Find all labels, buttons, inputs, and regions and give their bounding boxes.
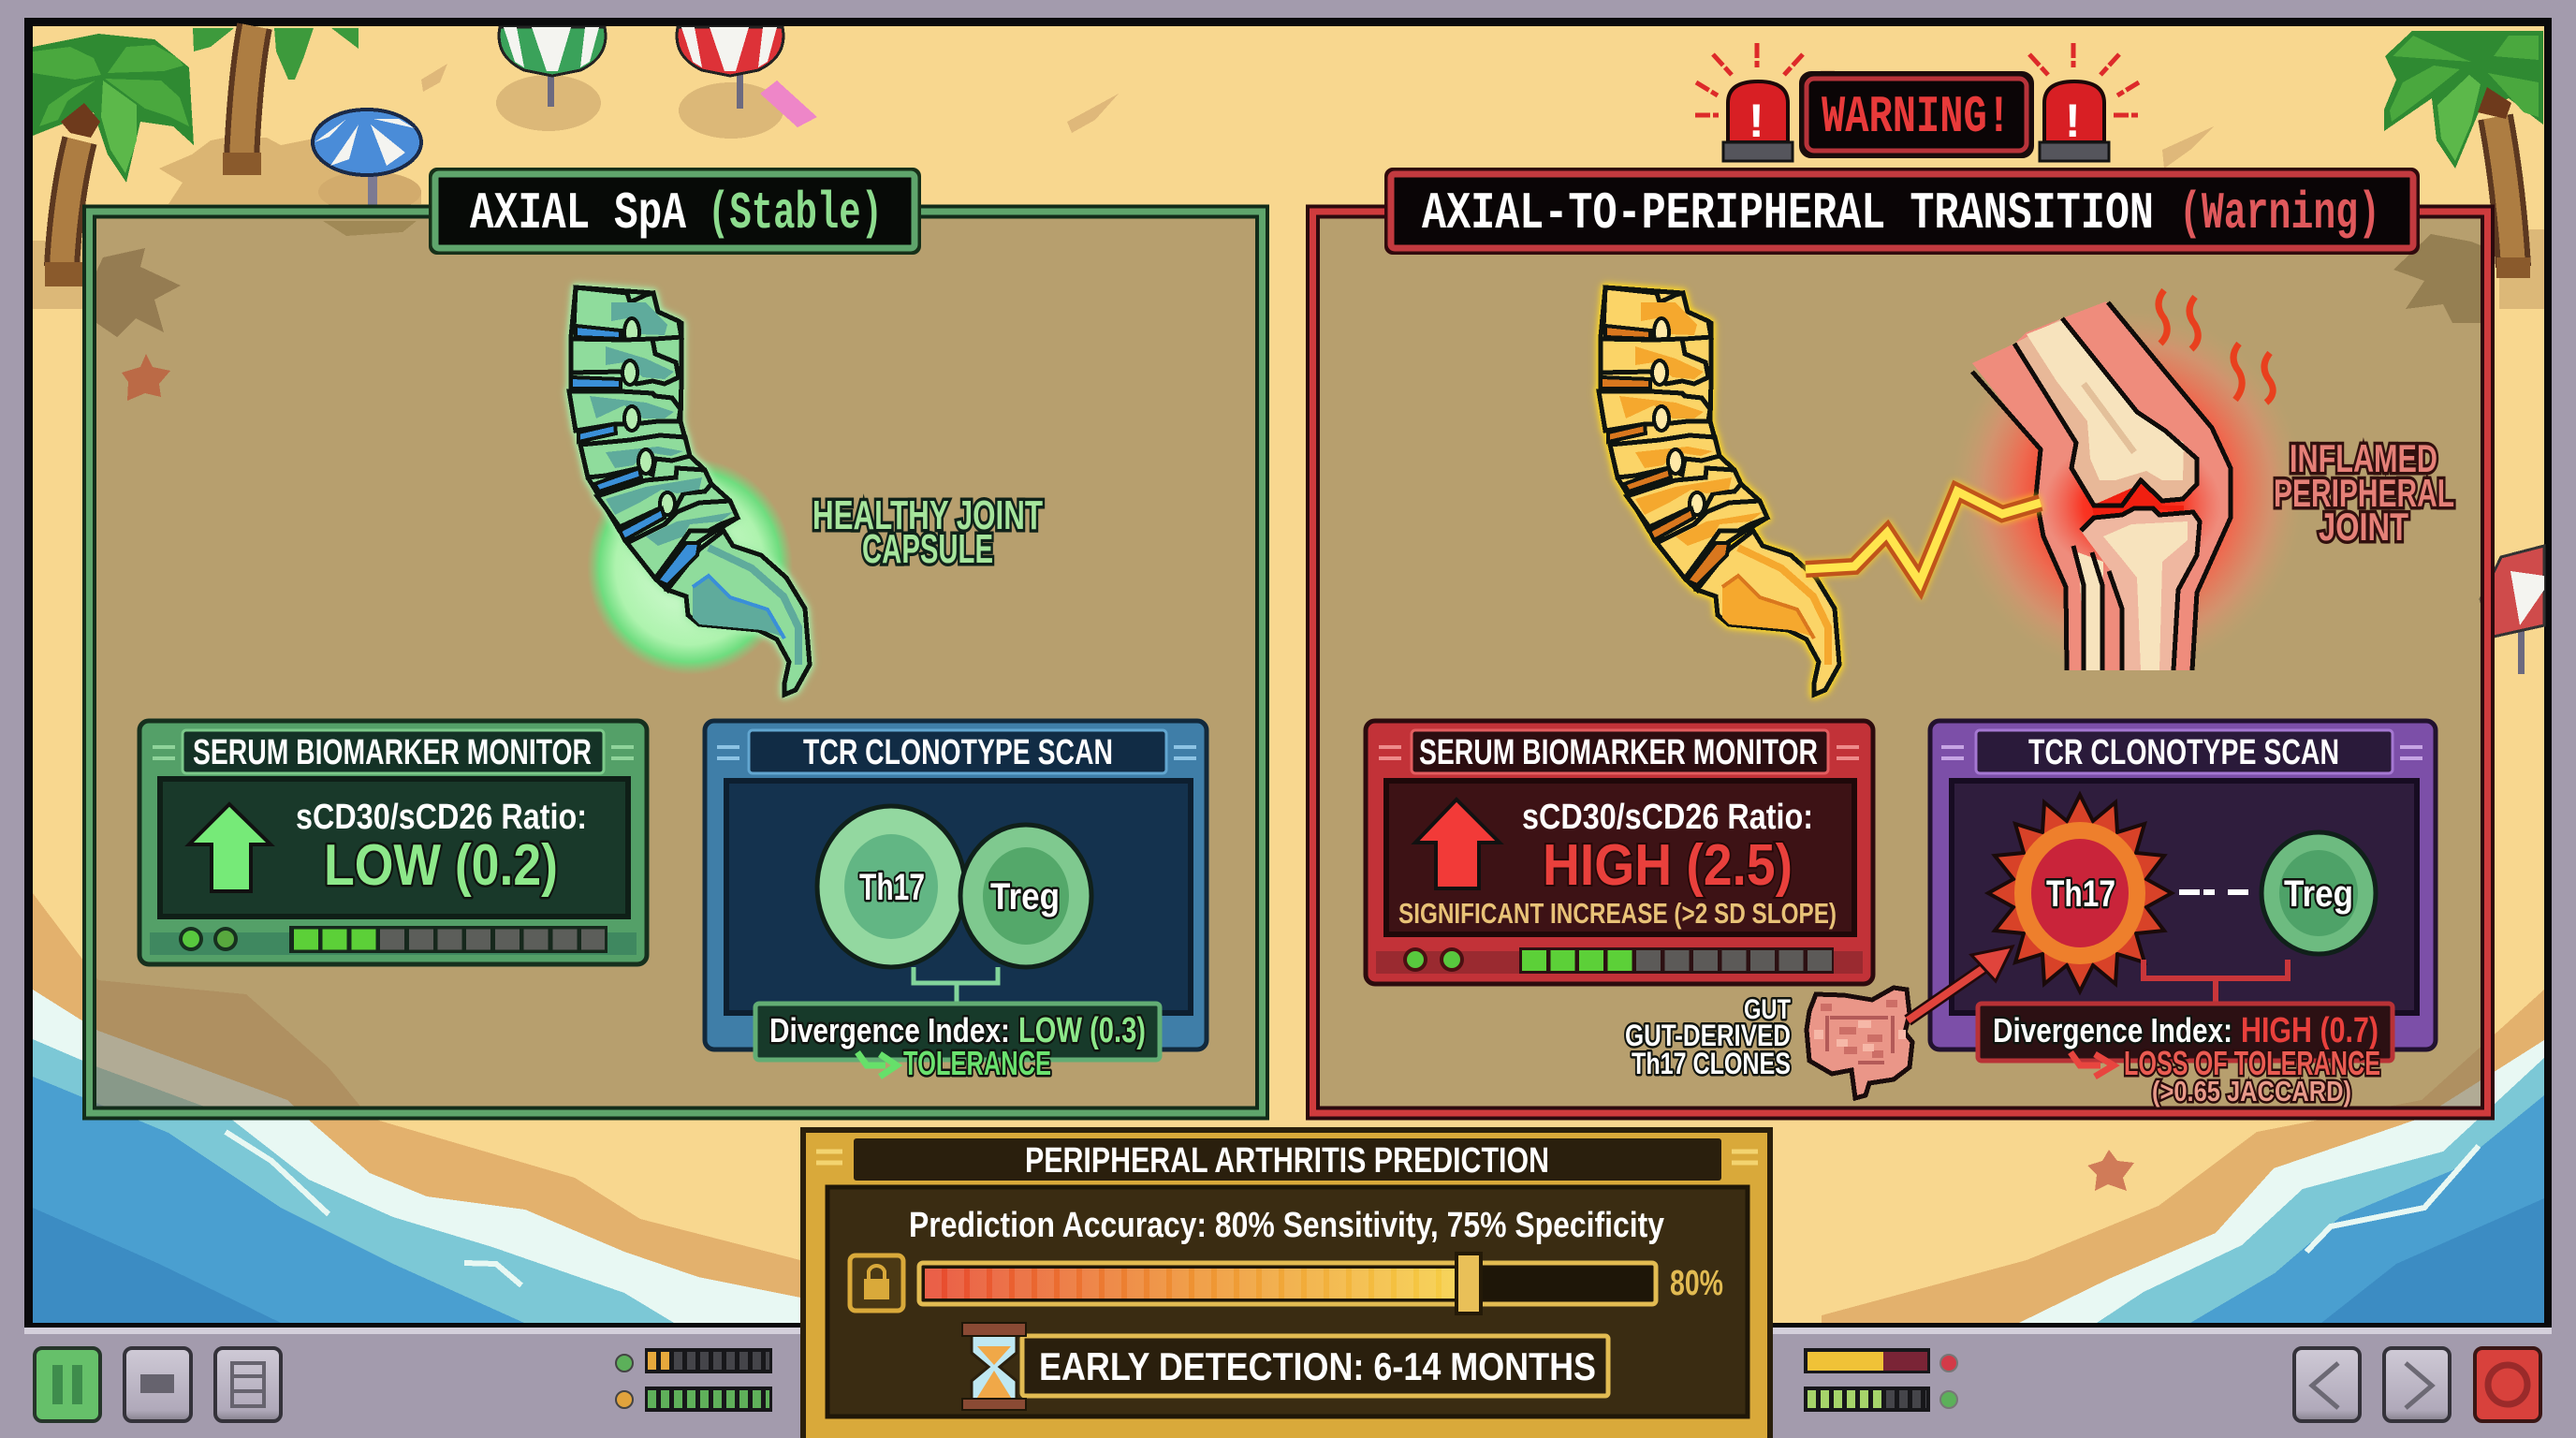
- ratio value: LOW (0.2): [324, 833, 558, 898]
- spine: inflamed gold: [1599, 287, 1839, 695]
- panel title: transition warning: AXIAL-TO-PERIPHERAL TRANSITION: [1422, 183, 2154, 243]
- panel title: transition warning: (Warning): [2179, 183, 2380, 243]
- starfish: beach right: [2087, 1150, 2134, 1191]
- button: previous: [2294, 1348, 2360, 1421]
- panel: axial SpA stable: [90, 212, 1262, 1113]
- palm tree: right: [2384, 31, 2543, 278]
- divergence index: Divergence Index:: [769, 1011, 1010, 1049]
- outcome: tolerance: TOLERANCE: [903, 1044, 1051, 1082]
- label: gut-derived Th17 clones: GUT: [1744, 994, 1791, 1025]
- bottom system bar highlight: [24, 1328, 2552, 1334]
- screen: [1386, 781, 1854, 934]
- status LEDs: [1403, 947, 1464, 972]
- panel title: axial SpA: [432, 170, 918, 252]
- beach umbrella: red: [677, 27, 817, 139]
- outcome: loss of tolerance: LOSS OF TOLERANCE: [2124, 1044, 2380, 1082]
- outcome: tolerance: [857, 1044, 1051, 1082]
- warning box: [1802, 74, 2031, 155]
- panel title: axial SpA: AXIAL SpA: [470, 183, 686, 243]
- status LEDs: [179, 927, 238, 951]
- icon: red arrow: [1415, 800, 1500, 888]
- inflamed glow: [1952, 309, 2304, 674]
- panel: TCR clonotype scan (low): [705, 721, 1207, 1060]
- label: gut-derived Th17 clones: GUT-DERIVED: [1625, 1019, 1791, 1052]
- panel: peripheral arthritis prediction: [803, 1130, 1770, 1438]
- panel: axial-to-peripheral transition: [1312, 212, 2488, 1113]
- slider value: 80%: [1670, 1264, 1723, 1303]
- icon: green arrow: [189, 804, 271, 891]
- ratio label: sCD30/sCD26 Ratio:: [1522, 798, 1813, 837]
- title bar: TCR CLONOTYPE SCAN: [2028, 733, 2339, 772]
- early detection box: [1022, 1336, 1608, 1396]
- level bar: [289, 926, 607, 953]
- label: gut-derived Th17 clones: [1625, 994, 1791, 1080]
- panel title: axial SpA: (Stable): [708, 183, 883, 243]
- cell: spiked Th17: Th17: [2046, 873, 2115, 915]
- title bar: PERIPHERAL ARTHRITIS PREDICTION: [1025, 1141, 1549, 1181]
- prediction accuracy: Prediction Accuracy: 80% Sensitivity, 75% Specificity: [909, 1206, 1664, 1245]
- icon: left siren: [1723, 81, 1793, 161]
- label: inflamed peripheral joint: [2274, 436, 2454, 549]
- cell: Treg: [960, 825, 1091, 967]
- warning box: WARNING!: [1822, 87, 2011, 147]
- cell: Treg: Treg: [2284, 873, 2353, 915]
- button: camera: [124, 1348, 191, 1421]
- palm shadow on sand: right: [2499, 229, 2544, 309]
- divergence index: LOW (0.3): [1018, 1011, 1146, 1050]
- icon: lock: [850, 1255, 903, 1311]
- siren rays: [1695, 43, 2139, 115]
- palm tree: far left: [33, 34, 194, 309]
- sand specks: [421, 64, 2214, 169]
- title bar: TCR CLONOTYPE SCAN: [803, 733, 1113, 772]
- palm shadow: [96, 248, 181, 337]
- warning banner: [1695, 43, 2139, 161]
- divergence index: [755, 1004, 1160, 1060]
- screen: [726, 781, 1191, 1013]
- capsule glow: [587, 458, 793, 675]
- icon: inflamed knee: [1972, 301, 2231, 670]
- button: next: [2384, 1348, 2450, 1421]
- cell: Th17: Th17: [859, 867, 925, 908]
- ratio value: HIGH (2.5): [1543, 833, 1793, 898]
- bracket: [2144, 960, 2288, 1005]
- lightning bolt: [1806, 492, 2041, 582]
- button: record: [2475, 1348, 2540, 1421]
- cell: Treg: [2261, 832, 2376, 954]
- divergence index: Divergence Index:: [1993, 1011, 2232, 1049]
- panel: serum biomarker monitor (low): [139, 721, 647, 964]
- status bars: left: [616, 1348, 772, 1412]
- dashed link: [2179, 889, 2248, 895]
- title bar: SERUM BIOMARKER MONITOR: [193, 733, 592, 772]
- bracket: [914, 967, 998, 1005]
- cell: spiked Th17: [1988, 795, 2172, 991]
- label: inflamed peripheral joint: JOINT: [2319, 505, 2408, 549]
- screen: [1952, 781, 2417, 1013]
- button: pause: [35, 1348, 100, 1421]
- starfish: [122, 354, 170, 401]
- label: healthy joint capsule: HEALTHY JOINT: [812, 492, 1043, 538]
- label: healthy joint capsule: [812, 492, 1043, 572]
- accuracy slider: [919, 1254, 1656, 1313]
- palm shadow on sand: second palm and umbrella: [159, 138, 421, 204]
- beach umbrella: right edge: [2481, 546, 2544, 674]
- palm shadow: [2393, 234, 2481, 323]
- divergence index: [1978, 1004, 2393, 1061]
- icon: hourglass: [962, 1323, 1026, 1410]
- cell: Th17: [817, 806, 965, 967]
- panel: TCR clonotype scan (high): [1930, 721, 2436, 1061]
- icon: right siren: [2040, 81, 2109, 161]
- panel title: transition warning: [1387, 170, 2417, 252]
- label: gut-derived Th17 clones: Th17 CLONES: [1632, 1047, 1791, 1080]
- screen: [160, 779, 628, 917]
- icon: right siren: !: [2065, 95, 2081, 147]
- panel: serum biomarker monitor (high): [1366, 721, 1873, 984]
- cell: Treg: Treg: [990, 876, 1060, 917]
- beach umbrella: green: [496, 27, 606, 131]
- label: inflamed peripheral joint: INFLAMED: [2290, 436, 2437, 480]
- outcome: loss of tolerance: [2071, 1044, 2380, 1108]
- spine: healthy teal: [569, 287, 810, 695]
- divergence index: HIGH (0.7): [2241, 1011, 2378, 1050]
- icon: gut: [1807, 988, 1912, 1098]
- beach umbrella: blue: [313, 110, 421, 213]
- early detection box: EARLY DETECTION: 6-14 MONTHS: [1039, 1344, 1596, 1388]
- palm tree: second left: [193, 26, 359, 175]
- ratio label: sCD30/sCD26 Ratio:: [296, 798, 587, 837]
- slope note: SIGNIFICANT INCREASE (>2 SD SLOPE): [1398, 897, 1837, 930]
- label: inflamed peripheral joint: PERIPHERAL: [2274, 471, 2454, 515]
- arrow: gut to Th17: [1908, 946, 2012, 1020]
- umbrella shadow: [323, 221, 417, 236]
- level bar: [1519, 947, 1834, 974]
- screen: [827, 1187, 1748, 1416]
- heat waves: [2159, 290, 2273, 403]
- label: healthy joint capsule: CAPSULE: [862, 526, 993, 572]
- title bar: SERUM BIOMARKER MONITOR: [1419, 733, 1818, 772]
- button: menu: [215, 1348, 281, 1421]
- status bars: right: [1804, 1348, 1957, 1412]
- outcome: loss of tolerance: (>0.65 JACCARD): [2152, 1075, 2351, 1108]
- side grips: [153, 747, 634, 758]
- icon: left siren: !: [1749, 95, 1764, 147]
